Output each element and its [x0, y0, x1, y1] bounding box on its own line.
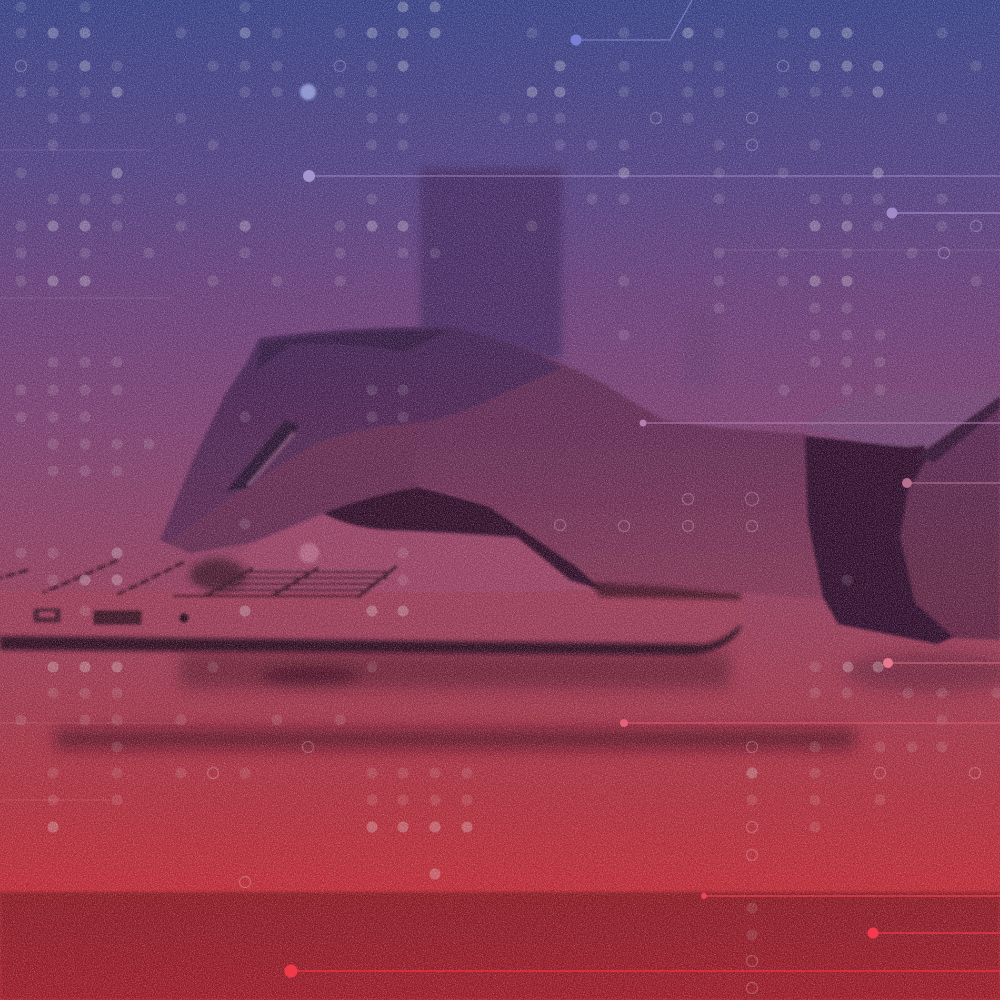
curled fingers, dark upper part	[160, 327, 562, 543]
line 9	[868, 928, 1000, 938]
laptop ports	[33, 608, 189, 625]
laptop base	[0, 592, 742, 650]
line 1	[303, 170, 1000, 182]
line 4	[640, 420, 1000, 426]
keyboard keys	[0, 560, 397, 598]
line 2	[570, 0, 692, 46]
glow node top	[300, 84, 316, 100]
shadow under palm	[323, 487, 602, 590]
line 3	[886, 208, 1000, 218]
line 5	[902, 478, 1000, 488]
line 8	[701, 893, 1000, 899]
arm beyond watch	[880, 405, 1000, 640]
gap between fingers	[225, 420, 300, 492]
watch case	[805, 388, 1000, 458]
watch case shadow	[915, 396, 1000, 462]
hand	[160, 327, 825, 600]
knuckle shadow	[255, 330, 450, 372]
smartwatch	[805, 388, 1000, 644]
table foreground dark band	[0, 892, 1000, 1000]
blurred building in background	[420, 168, 718, 385]
line 6	[883, 658, 1000, 668]
watch strap	[805, 436, 953, 644]
wrist and palm	[160, 327, 825, 600]
fingernail highlight	[248, 433, 294, 486]
line 10	[284, 964, 1000, 978]
laptop reflections on table	[55, 652, 1000, 749]
wrist shadow on laptop	[590, 582, 742, 600]
laptop bottom edge	[0, 626, 742, 655]
lower index finger	[167, 425, 417, 553]
line 7	[620, 719, 1000, 727]
fingertip shadow on keyboard	[190, 559, 246, 591]
faint left and right traces	[0, 150, 1000, 800]
laptop keyboard deck highlight	[180, 515, 600, 596]
bright dots	[53, 7, 878, 874]
laptop	[0, 515, 742, 650]
glowing dot by the fingertip	[299, 543, 319, 563]
